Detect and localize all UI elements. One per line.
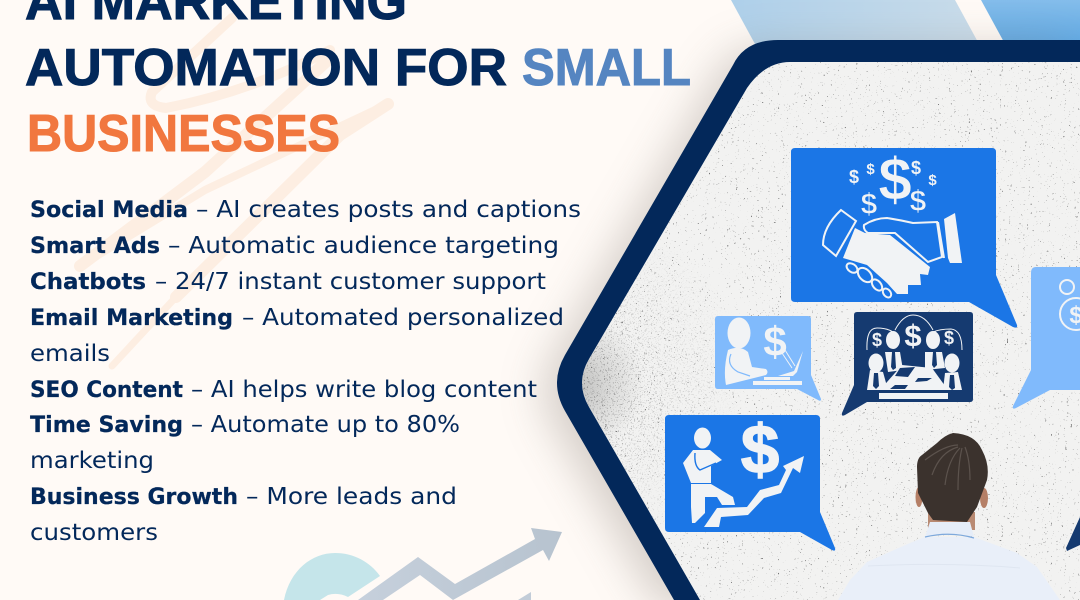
- icon: handshake: $: [928, 172, 937, 189]
- icon: handshake: $: [911, 158, 921, 178]
- icon: handshake: $: [910, 185, 927, 218]
- item: chatbots: – 24/7 instant customer support: [155, 269, 546, 295]
- item: time saving: Time Saving: [30, 412, 183, 438]
- item: business growth: [30, 484, 457, 546]
- decorative orange scribble: [80, 18, 388, 366]
- icon: person climbing growth arrow: [683, 411, 804, 527]
- person viewed from behind: [838, 433, 1060, 600]
- speech bubble: laptop worker: [715, 316, 821, 401]
- item: smart ads: [30, 233, 559, 259]
- item: business growth: – More leads and: [246, 484, 457, 510]
- title: SMALL: [522, 39, 691, 97]
- bottom chart decoration: [284, 528, 562, 600]
- item: social media: Social Media: [30, 197, 188, 223]
- icon: coin: [1060, 280, 1080, 330]
- item: email marketing: emails: [30, 341, 110, 367]
- item: social media: [30, 197, 581, 223]
- item: chatbots: Chatbots: [30, 269, 146, 295]
- top light blue stripes: [731, 0, 1080, 44]
- icon: handshake: $: [849, 167, 859, 187]
- icon: team meeting: $: [872, 330, 882, 350]
- speech bubble: right edge coin: [1013, 267, 1080, 409]
- speech bubble: growth: [665, 411, 835, 551]
- item: email marketing: Email Marketing: [30, 305, 233, 331]
- title: BUSINESSES: [27, 105, 340, 163]
- item: email marketing: [30, 305, 564, 367]
- item: seo content: [30, 377, 537, 403]
- icon: handshake: [823, 146, 962, 299]
- item: social media: – AI creates posts and captions: [196, 197, 581, 223]
- item: seo content: SEO Content: [30, 377, 183, 403]
- item: time saving: [30, 412, 460, 474]
- icon: handshake: $: [861, 188, 878, 221]
- icon: person at laptop: $: [763, 318, 787, 365]
- icon: team meeting: [867, 315, 962, 399]
- icon: person climbing growth arrow: $: [741, 411, 779, 488]
- speech bubble: bottom right tail: [1066, 517, 1080, 551]
- icon: team meeting: $: [944, 328, 954, 348]
- panel: hexagon photo frame: [540, 40, 1080, 600]
- feature list: [30, 197, 581, 546]
- item: time saving: marketing: [30, 448, 154, 474]
- item: business growth: customers: [30, 520, 158, 546]
- item: business growth: Business Growth: [30, 484, 238, 510]
- title: [25, 0, 691, 163]
- speech bubble: handshake: [791, 146, 1017, 328]
- item: email marketing: – Automated personalized: [242, 305, 564, 331]
- item: time saving: – Automate up to 80%: [191, 412, 460, 438]
- icon: handshake: $: [866, 161, 875, 178]
- title: AUTOMATION FOR: [25, 39, 507, 97]
- speech bubble: team meeting: [842, 312, 973, 416]
- item: smart ads: Smart Ads: [30, 233, 160, 259]
- item: seo content: – AI helps write blog content: [191, 377, 537, 403]
- item: smart ads: – Automatic audience targeting: [168, 233, 559, 259]
- icon: team meeting: $: [904, 318, 922, 353]
- icon: handshake: $: [878, 146, 912, 213]
